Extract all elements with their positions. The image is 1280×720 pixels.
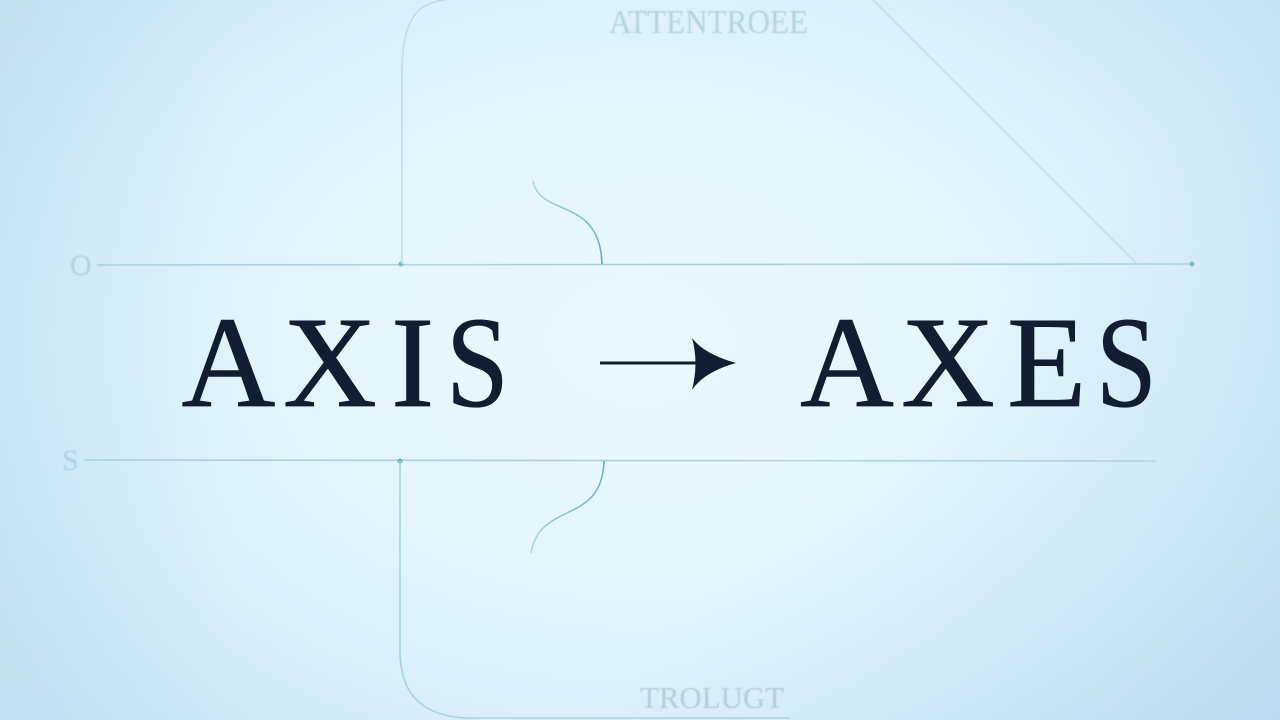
diagonal line	[873, 0, 1137, 264]
heading: AXES: S	[1096, 290, 1157, 434]
heading: AXIS: S	[446, 291, 509, 435]
top faint label: ATTENTROEE	[609, 4, 808, 41]
bottom faint label: TROLUGT	[640, 680, 784, 715]
left faint label S: S	[62, 444, 79, 477]
upper curved bracket	[533, 181, 602, 264]
upper rounded frame line	[402, 0, 446, 264]
upper axis line	[97, 262, 1194, 266]
heading: AXIS: AXI	[182, 291, 434, 435]
lower axis line	[84, 458, 1156, 464]
heading: AXES: AXE	[800, 291, 1086, 435]
arrow	[600, 338, 736, 390]
lower curved bracket	[531, 461, 604, 553]
left faint label O: O	[70, 249, 92, 282]
lower rounded frame line	[400, 461, 790, 718]
